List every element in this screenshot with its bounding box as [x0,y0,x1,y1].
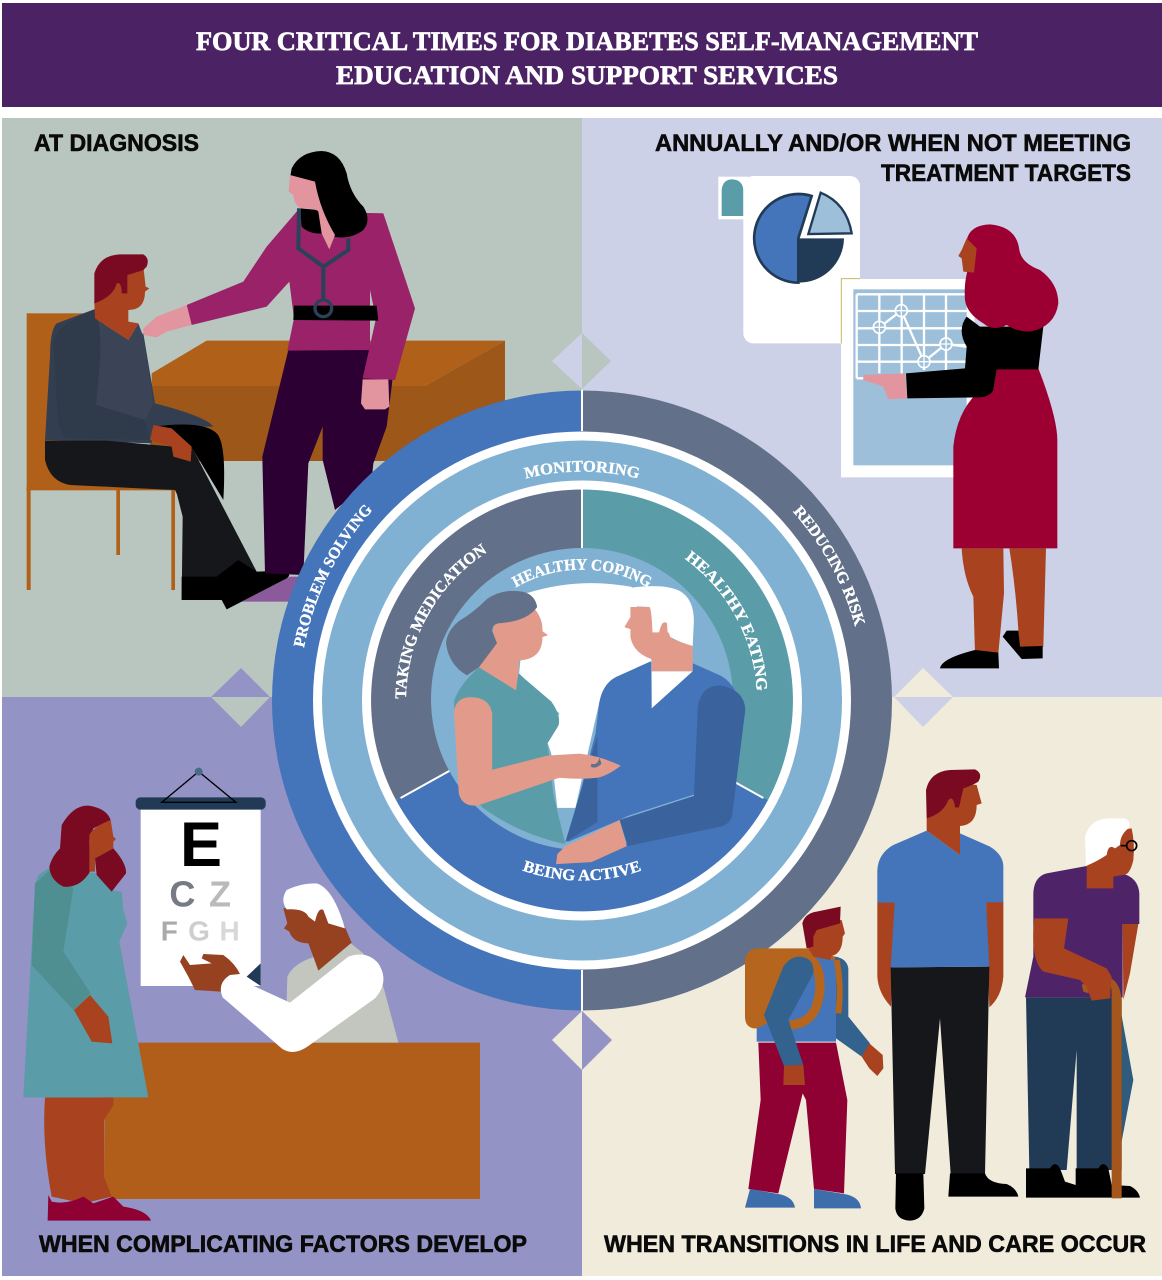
woman [446,591,621,844]
pie chart document [718,176,860,343]
outer ring [272,390,892,1010]
label: taking medication: TAKING MEDICATION [395,543,486,699]
adult man [877,769,1018,1221]
doctor [143,151,415,575]
presenter [863,224,1058,668]
heading: when complicating factors develop: WHEN COMPLICATING FACTORS DEVELOP [39,1231,527,1258]
desk [104,1043,480,1199]
eye chart: G [188,916,210,947]
inner ring [371,490,793,911]
central wheel [272,390,892,1011]
heading: annually and/or when not meeting treatment targets: TREATMENT TARGETS [881,160,1131,187]
title [196,27,978,90]
older man with cane [1025,818,1140,1198]
label: being active: BEING ACTIVE [522,860,642,881]
eye chart: F [161,916,178,947]
label: problem solving: PROBLEM SOLVING [294,504,372,648]
panel: transitions background [582,697,1162,1276]
label: healthy coping: HEALTHY COPING [510,558,652,588]
eye chart: E [180,810,222,880]
title: EDUCATION AND SUPPORT SERVICES [336,61,838,90]
panel: complicating factors background [2,697,582,1276]
patient woman [23,806,151,1221]
eye chart: H [220,916,240,947]
diamond: top [552,333,611,389]
panel: at diagnosis background [2,118,582,697]
line chart board [841,279,974,477]
illustration: eye exam [23,768,480,1221]
heading: annually and/or when not meeting treatment targets [655,130,1131,187]
illustration: couple talking [446,583,745,864]
panel: annually background [582,118,1162,697]
center disc [431,548,733,850]
eye chart [136,768,266,986]
desk [150,341,505,461]
header banner [2,3,1162,107]
diamond: bottom [552,1011,612,1070]
eye chart: Z [209,874,231,915]
label: reducing risk: REDUCING RISK [792,504,866,627]
label: monitoring: MONITORING [523,460,640,479]
child with backpack [745,907,883,1208]
title: FOUR CRITICAL TIMES FOR DIABETES SELF-MANAGEMENT [196,27,978,56]
diamond: left [211,668,270,727]
heading: at diagnosis: AT DIAGNOSIS [34,130,199,157]
middle ring [322,440,842,960]
diamond: right [894,668,953,727]
heading: when transitions in life and care occur: WHEN TRANSITIONS IN LIFE AND CARE OCCUR [604,1231,1146,1258]
patient [45,254,307,609]
heading: annually and/or when not meeting treatment targets: ANNUALLY AND/OR WHEN NOT MEETING [655,130,1131,157]
man [556,586,745,864]
chair [27,313,175,590]
illustration: three generations [745,769,1140,1221]
illustration: woman presenting charts [718,176,1058,668]
illustration: doctor examining seated patient [27,151,505,609]
label: healthy eating: HEALTHY EATING [684,550,768,690]
eye doctor [180,883,398,1052]
eye chart: C [169,874,195,915]
